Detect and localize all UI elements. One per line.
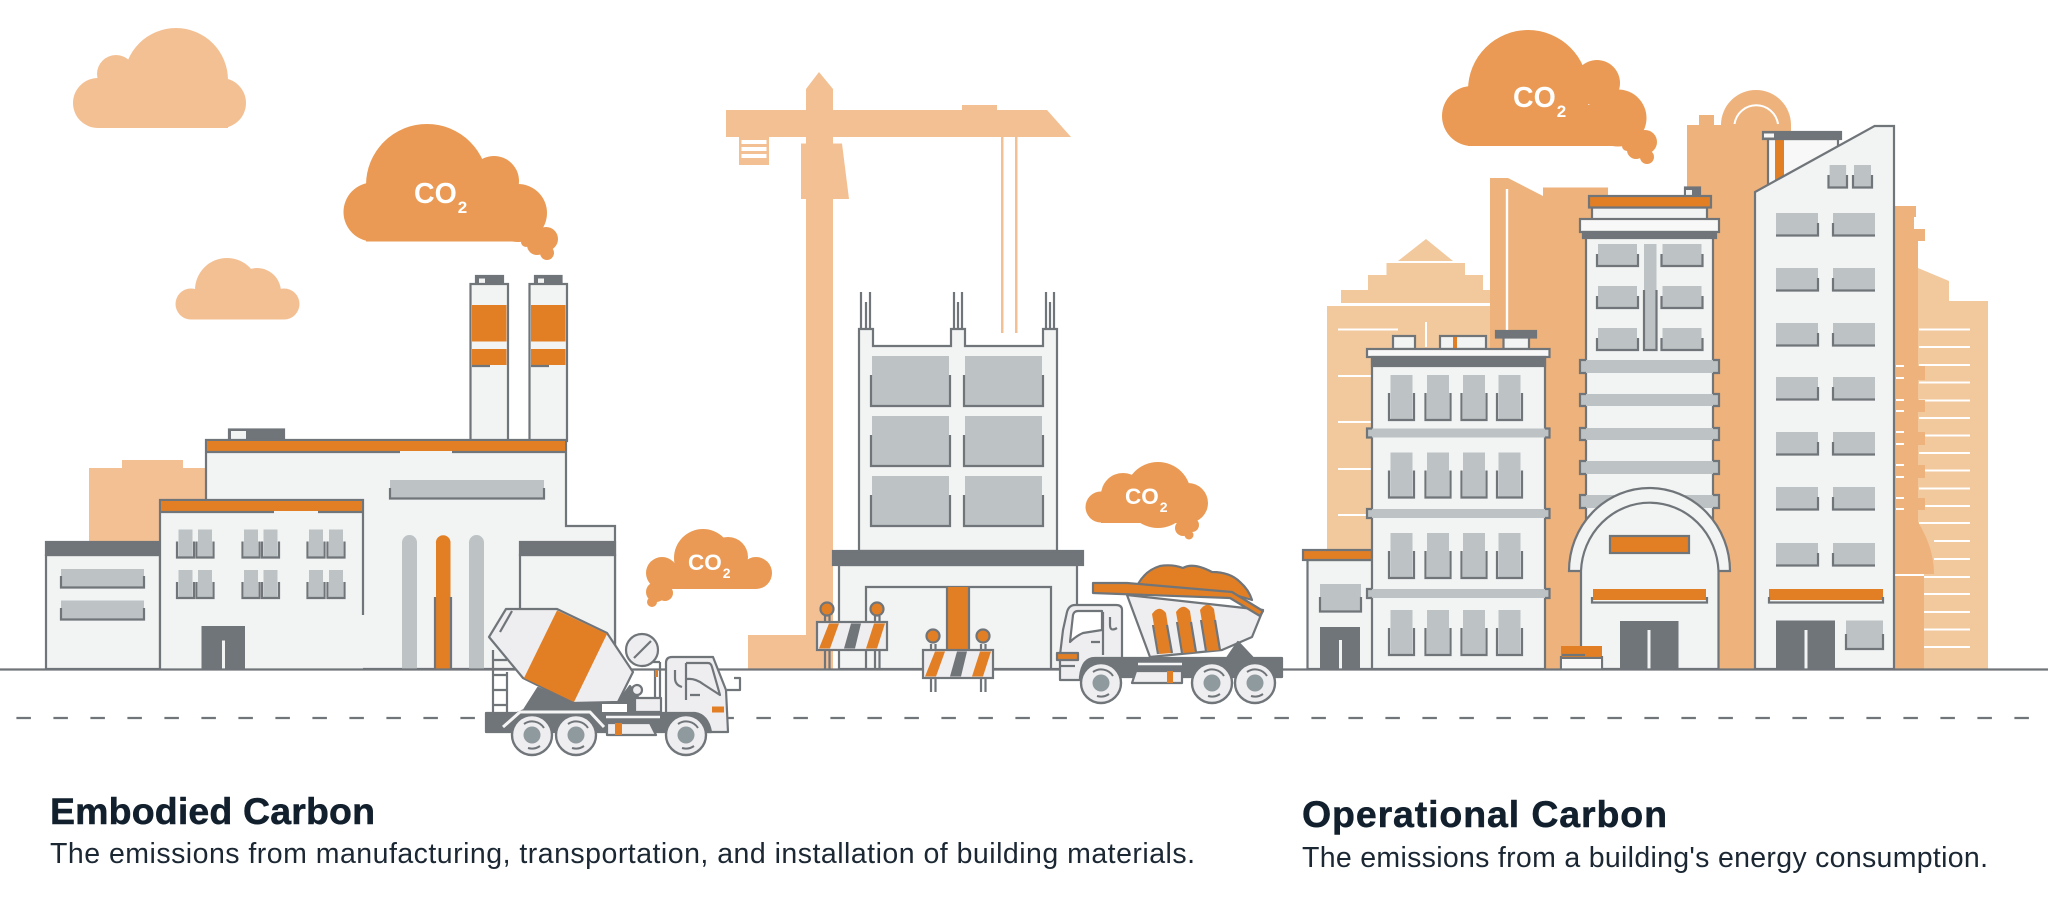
CO2 label: 2 (458, 198, 467, 217)
dirt load (1138, 565, 1252, 600)
background city silhouette: mid orange tower with dome (1490, 90, 1791, 669)
dump bed (1093, 583, 1263, 657)
building under construction (833, 292, 1083, 669)
rebar (861, 292, 1054, 329)
step box (607, 723, 656, 735)
background city silhouette: right orange tower (1890, 206, 1934, 669)
mixer drum (489, 609, 633, 703)
background city silhouette: right light tower (1918, 268, 1988, 669)
slanted-roof tower (1755, 126, 1894, 669)
CO2 label: CO (414, 178, 457, 210)
factory main hall (206, 430, 615, 669)
concrete slab (833, 551, 1083, 565)
wheels (512, 715, 706, 755)
heading: embodied carbon: Embodied Carbon (50, 790, 375, 832)
CO2 label: CO (1125, 484, 1159, 509)
mixer support and frame (486, 686, 711, 732)
gauge and pipe (626, 634, 660, 698)
heading: operational carbon: Operational Carbon (1302, 793, 1667, 835)
factory right annex (520, 542, 615, 669)
cloud: top left (73, 28, 246, 128)
text: embodied carbon description: The emissions from manufacturing, transportation, and installation of building materials. (50, 838, 1195, 870)
arched tower (1569, 188, 1730, 669)
cloud: factory CO2 (344, 124, 558, 260)
cloud: dump truck CO2 (1086, 462, 1208, 540)
CO2 label: CO (1513, 82, 1556, 114)
cloud: cement truck CO2 (646, 529, 772, 607)
road barrier 2 (923, 630, 993, 692)
factory left block (46, 542, 160, 669)
ground floor (839, 565, 1077, 669)
cab (666, 657, 740, 732)
road barrier 1 (817, 602, 887, 669)
CO2 label: 2 (1160, 499, 1168, 515)
small corner building (1303, 550, 1372, 669)
factory chimneys (470, 276, 567, 441)
cab (1057, 605, 1122, 680)
factory (46, 276, 615, 669)
road centre dashes (16, 717, 2044, 719)
ladder (493, 650, 507, 713)
upper frame with windows (859, 329, 1057, 551)
CO2 label: CO (688, 550, 722, 575)
cloud: operational CO2 (1442, 30, 1657, 164)
background city silhouette: light left tower (1327, 239, 1491, 669)
tower crane (726, 72, 1071, 669)
step box (1132, 664, 1182, 683)
cloud: lower left (176, 258, 300, 320)
CO2 label: 2 (723, 565, 731, 581)
chassis (1080, 642, 1282, 677)
ground line (0, 668, 2048, 671)
background building behind factory (89, 460, 207, 542)
factory office block (160, 500, 363, 669)
CO2 label: 2 (1557, 102, 1566, 121)
wheels (1081, 663, 1275, 703)
cement mixer truck (486, 609, 740, 755)
apartment building (1367, 331, 1550, 669)
bench (1561, 646, 1602, 669)
text: operational carbon description: The emissions from a building's energy consumption. (1302, 842, 1988, 874)
dump truck (1057, 565, 1282, 703)
city buildings (1303, 126, 1894, 669)
